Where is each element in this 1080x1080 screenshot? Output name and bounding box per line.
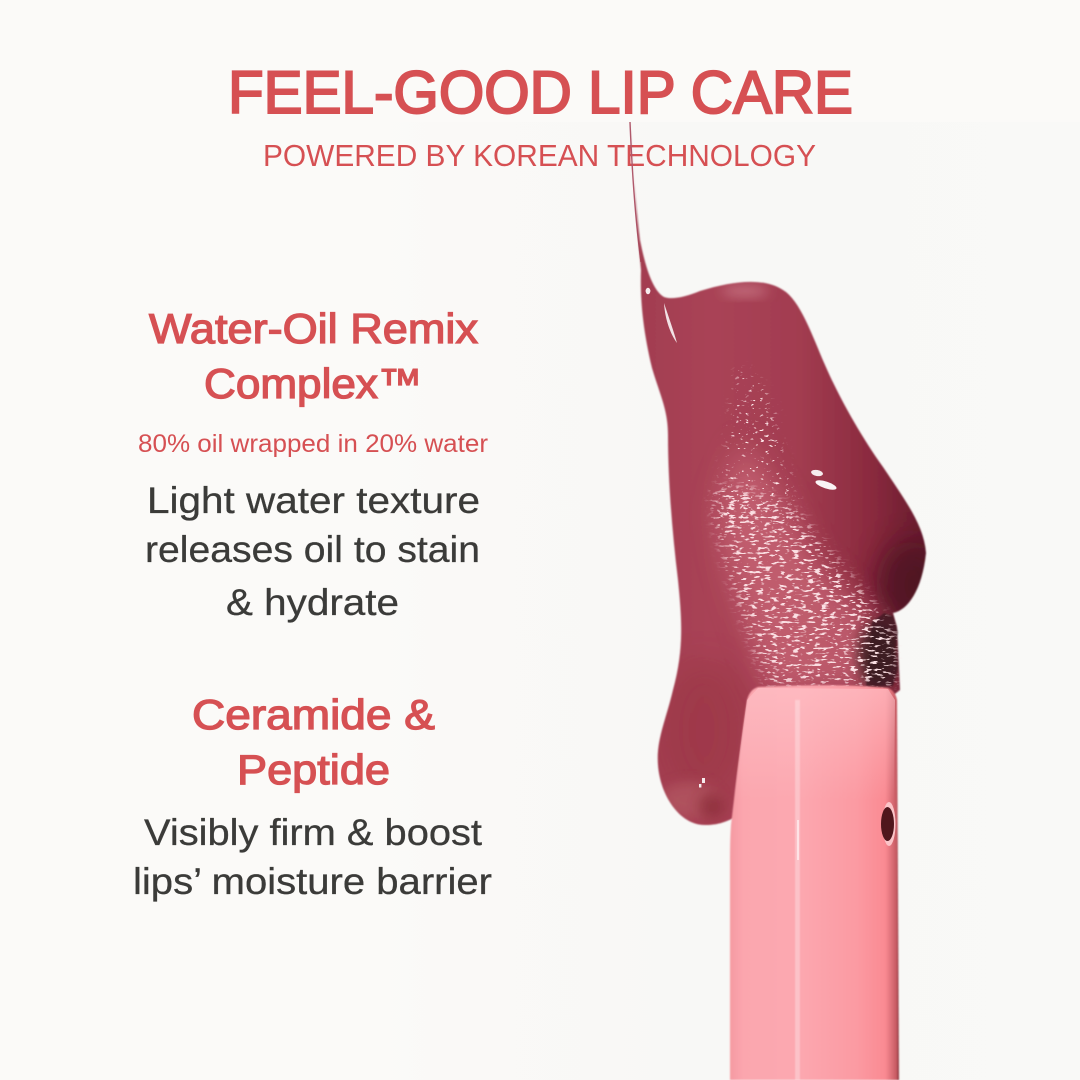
gloss swatch bbox=[632, 136, 927, 826]
shading: dark right lobe bbox=[876, 541, 944, 629]
title: FEEL-GOOD LIP CARE bbox=[228, 59, 853, 126]
lip product: gloss swatch on applicator bbox=[620, 110, 944, 1080]
heading: water-oil remix complex: Water-Oil Remix bbox=[149, 305, 478, 352]
body copy: texture benefit: & hydrate bbox=[226, 582, 399, 623]
highlight: top rim bbox=[721, 286, 769, 296]
text block: water-oil remix complex bbox=[138, 305, 488, 623]
applicator tube bbox=[730, 685, 899, 1080]
body copy: texture benefit: releases oil to stain bbox=[145, 529, 480, 570]
gloss thread bbox=[630, 122, 641, 262]
tube highlight streak bbox=[795, 700, 800, 1080]
heading: water-oil remix complex bbox=[149, 305, 478, 407]
body copy: texture benefit: Light water texture bbox=[147, 480, 480, 521]
brush hair tip bbox=[866, 613, 898, 686]
heading: water-oil remix complex: Complex™ bbox=[204, 360, 422, 407]
body copy: texture benefit bbox=[145, 480, 480, 623]
applied texture glow bbox=[718, 440, 890, 690]
note: oil and water ratio: 80% oil wrapped in 20% water bbox=[138, 430, 488, 458]
heading: ceramide and peptide: Peptide bbox=[237, 746, 390, 793]
body copy: barrier benefit: lips’ moisture barrier bbox=[133, 861, 492, 902]
dark brush tip bbox=[858, 621, 898, 689]
body copy: barrier benefit bbox=[133, 812, 492, 902]
texture: dense bristle marks bbox=[704, 480, 900, 690]
heading: ceramide and peptide: Ceramide & bbox=[192, 691, 435, 738]
body copy: barrier benefit: Visibly firm & boost bbox=[144, 812, 483, 853]
subtitle: POWERED BY KOREAN TECHNOLOGY bbox=[263, 138, 816, 173]
tube top sheen bbox=[733, 688, 895, 800]
text block: ceramide and peptide bbox=[133, 691, 492, 902]
texture: sparse sparkle specks bbox=[707, 365, 808, 530]
tube hole bbox=[881, 802, 896, 846]
heading: ceramide and peptide bbox=[192, 691, 435, 793]
highlight: neck and surface glints bbox=[646, 288, 838, 788]
shading: lower drip bbox=[666, 670, 738, 785]
